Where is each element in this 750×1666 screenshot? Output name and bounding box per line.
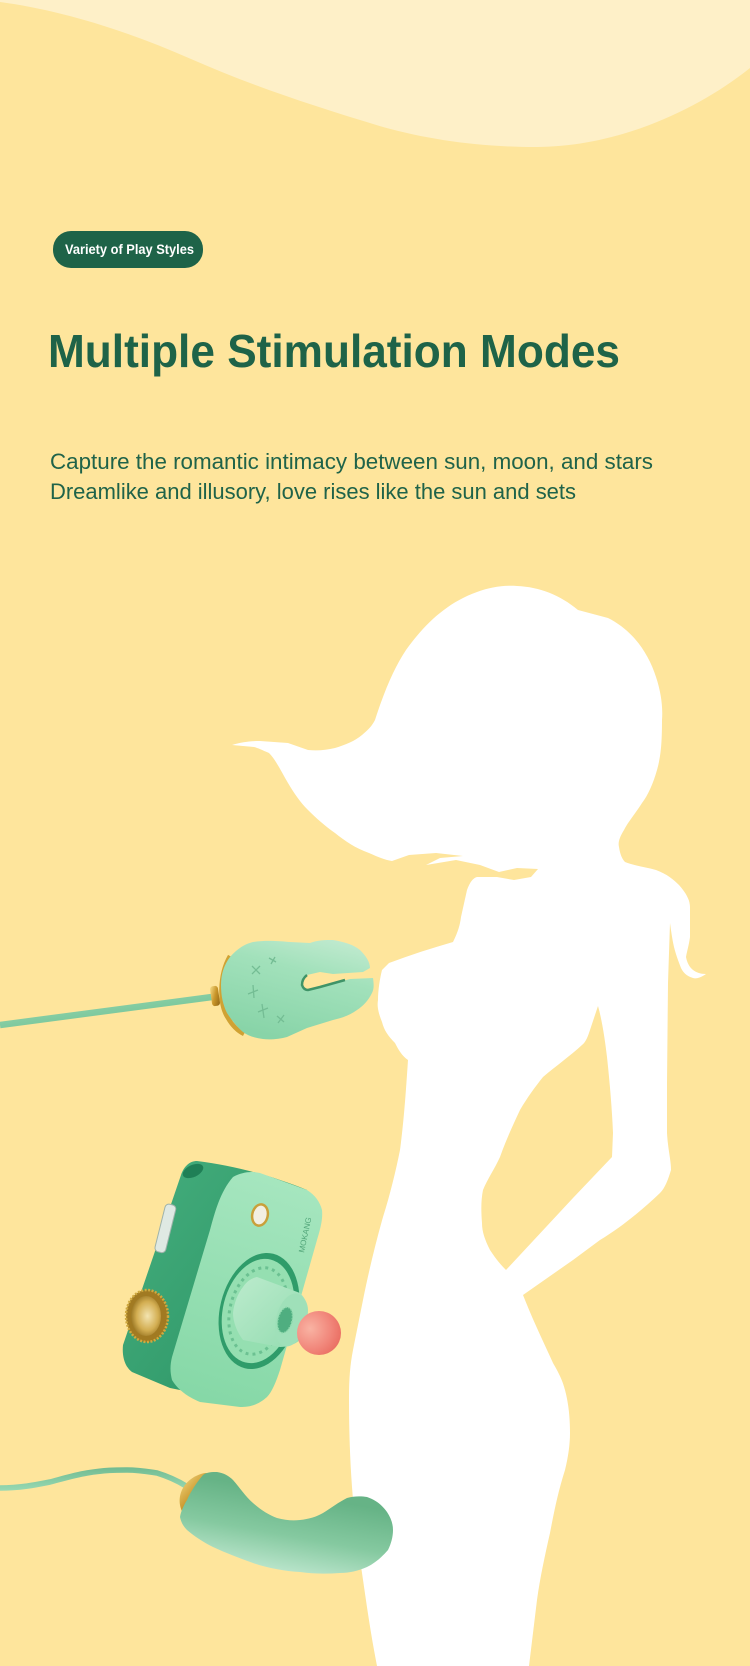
top port bbox=[180, 1161, 206, 1181]
silver slider bbox=[154, 1203, 177, 1253]
description text bbox=[50, 449, 653, 504]
cable bbox=[0, 997, 212, 1025]
badge: Variety of Play Styles bbox=[53, 231, 203, 268]
nozzle opening bbox=[275, 1306, 295, 1334]
cable bbox=[0, 1470, 186, 1488]
description text: Capture the romantic intimacy between sun, moon, and stars bbox=[50, 449, 653, 474]
bunny body bbox=[221, 940, 374, 1039]
lens ring bbox=[207, 1244, 311, 1378]
slit edge bbox=[302, 975, 345, 990]
title: Multiple Stimulation Modes bbox=[48, 325, 620, 377]
badge: Variety of Play Styles: Variety of Play Styles bbox=[65, 242, 194, 257]
product: curved vibrator with cable bbox=[0, 1470, 393, 1574]
gold rim bbox=[221, 956, 244, 1034]
camera back shell bbox=[123, 1161, 307, 1400]
product: bunny clamp with cable bbox=[0, 940, 374, 1039]
embossed stars bbox=[248, 957, 284, 1023]
coral ball bbox=[297, 1311, 341, 1355]
body bbox=[180, 1472, 393, 1574]
gold connector bbox=[210, 986, 220, 1006]
product: camera-shaped suction device bbox=[123, 1161, 341, 1407]
suction nozzle bbox=[233, 1277, 308, 1347]
camera front face bbox=[170, 1172, 322, 1407]
flash button bbox=[249, 1201, 271, 1229]
description text: Dreamlike and illusory, love rises like the sun and sets bbox=[50, 479, 576, 504]
woman silhouette bbox=[232, 586, 706, 1666]
brand mark: MOKANG bbox=[297, 1216, 313, 1253]
gold knob bbox=[126, 1290, 168, 1342]
nozzle tip bbox=[270, 1290, 312, 1350]
top wave bbox=[0, 0, 750, 147]
gold cap bbox=[180, 1473, 215, 1513]
